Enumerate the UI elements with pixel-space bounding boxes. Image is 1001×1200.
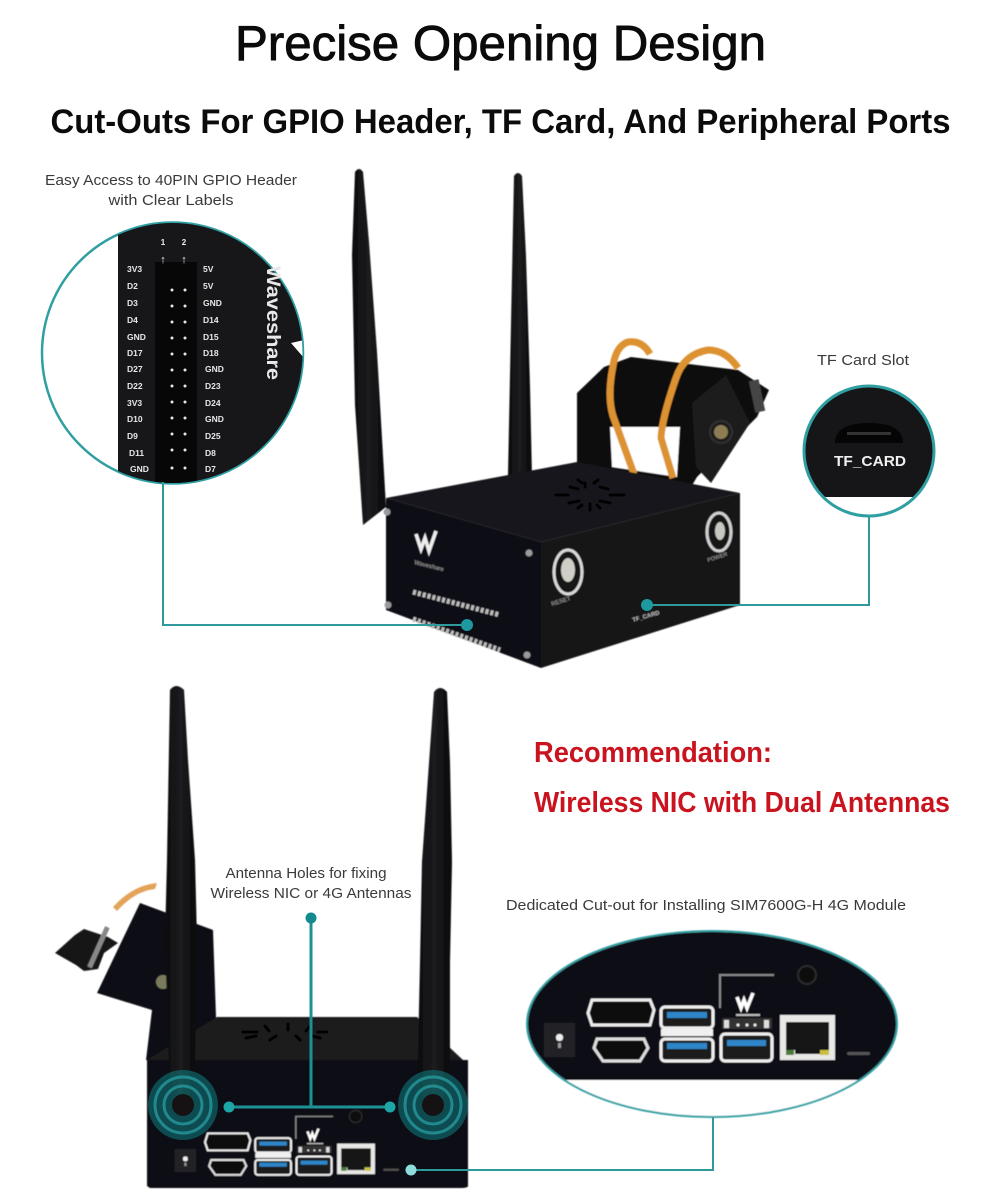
recommendation heading: Recommendation: — [534, 737, 772, 769]
Waveshare vertical label: Waveshare — [262, 266, 283, 380]
right rear antenna — [417, 688, 452, 1102]
GPIO pin numbers — [160, 238, 187, 266]
connector line: TF card — [641, 517, 869, 611]
GPIO left labels: D9 — [127, 431, 138, 441]
panel: TF card circle — [804, 386, 934, 516]
antenna hole rings — [148, 1070, 468, 1140]
TF label: TF_CARD — [632, 610, 661, 624]
title: Precise Opening Design — [235, 17, 766, 71]
left ring — [148, 1070, 218, 1140]
antenna callout connector — [224, 912, 396, 1112]
TF label text: TF_CARD — [834, 453, 906, 470]
GPIO left labels: D27 — [127, 364, 143, 374]
GPIO left labels: D2 — [127, 281, 138, 291]
GPIO right labels: D23 — [205, 381, 221, 391]
bottom device top face — [147, 1017, 463, 1060]
reset button — [551, 550, 582, 608]
GPIO right labels: D14 — [203, 315, 219, 325]
power button — [707, 513, 731, 564]
GPIO right labels: 5V — [203, 264, 214, 274]
fan vents rear — [243, 1024, 327, 1040]
rear camera bracket — [55, 883, 216, 1062]
oval ports — [544, 966, 870, 1061]
GPIO pin numbers: ↑ — [160, 254, 166, 266]
right ring — [398, 1070, 468, 1140]
GPIO right labels: D18 — [203, 348, 219, 358]
connector line: GPIO callout — [163, 482, 473, 631]
GPIO right labels: D24 — [205, 398, 221, 408]
top device left face — [386, 498, 541, 668]
GPIO left labels: D3 — [127, 298, 138, 308]
subtitle: Cut-Outs For GPIO Header, TF Card, And Peripheral Ports — [50, 103, 950, 141]
reset button: RESET — [551, 596, 572, 608]
antenna caption: Wireless NIC or 4G Antennas — [210, 886, 412, 902]
GPIO pin dots — [170, 288, 186, 470]
rear ports — [175, 1110, 399, 1175]
GPIO right labels: D8 — [205, 448, 216, 458]
GPIO right labels: D7 — [205, 464, 216, 474]
GPIO black plate — [118, 223, 302, 483]
GPIO left labels: D22 — [127, 381, 143, 391]
GPIO left labels: D4 — [127, 315, 138, 325]
GPIO left labels — [127, 264, 149, 474]
GPIO pin numbers: ↑ — [181, 254, 187, 266]
camera bracket — [577, 342, 769, 497]
GPIO left labels: 3V3 — [127, 398, 142, 408]
GPIO left labels: GND — [130, 464, 149, 474]
connector line: SIM module — [406, 1117, 713, 1176]
module caption: Dedicated Cut-out for Installing SIM7600G-H 4G Module — [506, 898, 906, 914]
GPIO left labels: D11 — [129, 448, 144, 458]
GPIO caption: with Clear Labels — [107, 193, 234, 209]
TF caption: TF Card Slot — [817, 353, 909, 369]
left rear antenna — [165, 686, 197, 1100]
top device top face — [386, 462, 740, 542]
screws — [384, 508, 532, 658]
left antenna — [352, 169, 386, 525]
power button: POWER — [707, 552, 728, 564]
logo text: Waveshare — [414, 560, 445, 573]
panel: port zoom oval — [527, 931, 897, 1117]
GPIO right labels: 5V — [203, 281, 214, 291]
GPIO caption: Easy Access to 40PIN GPIO Header — [45, 173, 297, 189]
GPIO right labels: GND — [203, 298, 222, 308]
GPIO left labels: D10 — [127, 414, 143, 424]
GPIO right labels: D15 — [203, 332, 219, 342]
GPIO pin numbers: 1 — [161, 238, 166, 247]
right antenna — [508, 173, 532, 478]
red recommendation — [534, 737, 950, 819]
GPIO right labels: GND — [205, 414, 224, 424]
GPIO right labels: D25 — [205, 431, 221, 441]
ribbon cables — [610, 342, 738, 478]
GPIO left labels: D17 — [127, 348, 143, 358]
top device right face — [541, 493, 740, 668]
antenna caption: Antenna Holes for fixing — [226, 866, 386, 882]
GPIO right labels: GND — [205, 364, 224, 374]
fan vents — [556, 480, 624, 510]
bottom device — [55, 686, 468, 1188]
top device — [352, 169, 769, 668]
GPIO left labels: 3V3 — [127, 264, 142, 274]
recommendation body: Wireless NIC with Dual Antennas — [534, 787, 950, 819]
panel: GPIO zoom circle — [42, 215, 313, 495]
bottom device front face — [147, 1060, 468, 1188]
GPIO left labels: GND — [127, 332, 146, 342]
GPIO right labels — [203, 264, 224, 474]
GPIO pin numbers: 2 — [182, 238, 187, 247]
front GPIO label strips — [413, 592, 500, 650]
logo — [416, 531, 436, 551]
